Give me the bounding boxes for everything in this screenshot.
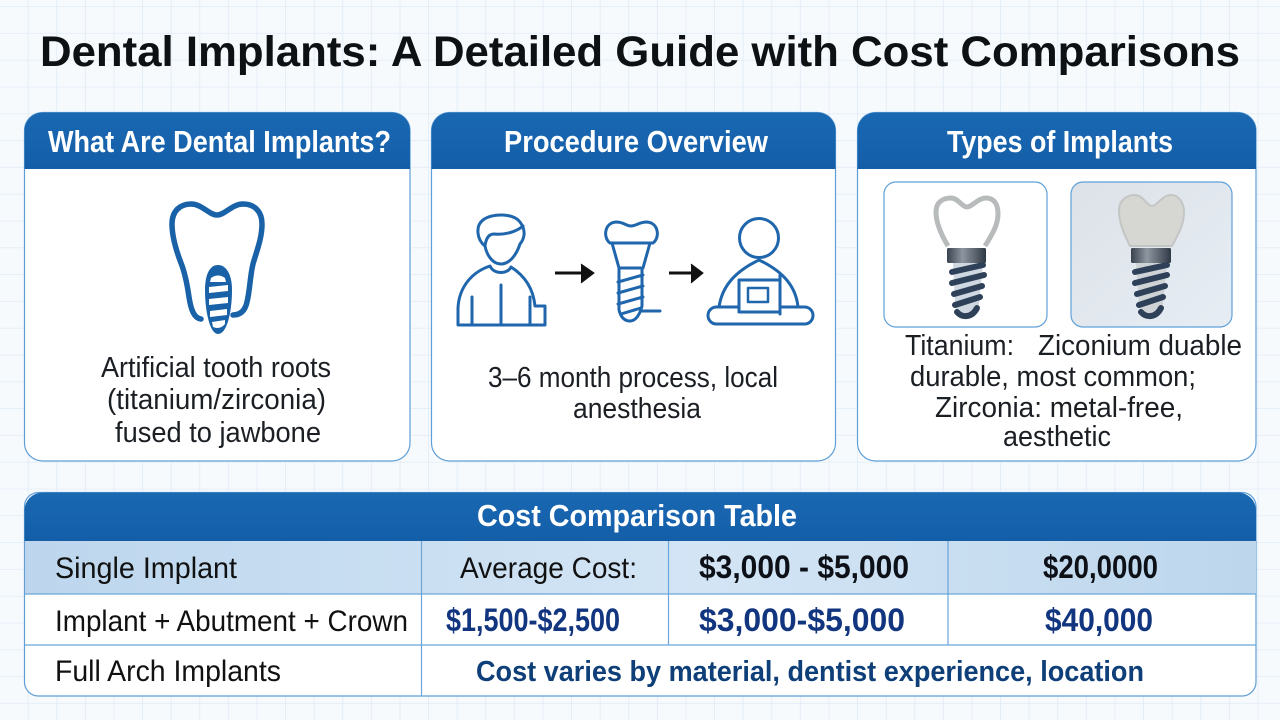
image card: titanium implant [884, 182, 1047, 327]
panel header: procedure overview [432, 112, 836, 169]
arrow: patient to implant [555, 264, 594, 283]
table heading: Cost Comparison Table [477, 498, 797, 533]
heading: procedure overview: Procedure Overview [504, 124, 769, 159]
table row: single implant [25, 541, 1256, 594]
text: what are dental implants description: Artificial tooth roots [101, 352, 331, 384]
panel: types of implants [858, 112, 1256, 461]
table row: implant + abutment + crown: $40,000 [1045, 602, 1153, 638]
arrow: implant to recovery [669, 264, 703, 283]
icon: dentist with monitor [708, 218, 813, 324]
text: procedure description: 3–6 month process, local [488, 362, 778, 394]
text: implant types description: Zirconia: metal-free, [935, 392, 1183, 424]
text: what are dental implants description: fused to jawbone [115, 417, 321, 449]
text: procedure description: anesthesia [573, 393, 702, 425]
heading: what are dental implants: What Are Dental Implants? [48, 124, 391, 159]
table header bar [24, 492, 1256, 541]
icon: implant [606, 222, 660, 321]
panel header: types of implants [858, 112, 1256, 169]
title: Dental Implants: A Detailed Guide with Cost Comparisons [40, 28, 1240, 76]
icon: tooth with implant [172, 204, 262, 334]
text: implant types description: aesthetic [1003, 421, 1111, 453]
text: implant types description: durable, most common; [910, 361, 1196, 393]
icon: implant screw in tooth [205, 265, 232, 334]
icon: patient [458, 215, 545, 325]
panel header: what are dental implants [24, 112, 410, 169]
table row: single implant: $20,0000 [1043, 549, 1158, 585]
text: implant types description: Ziconium duable [1038, 330, 1242, 362]
table row: full arch implants [55, 655, 1144, 688]
table row: implant + abutment + crown: $1,500-$2,500 [446, 602, 620, 638]
heading: types of implants: Types of Implants [947, 124, 1173, 159]
image card: zirconia implant [1071, 182, 1232, 327]
table row: full arch implants: Full Arch Implants [55, 655, 281, 688]
cost comparison table [24, 492, 1256, 696]
table row: single implant: Single Implant [55, 552, 238, 585]
panel: procedure overview [432, 112, 836, 461]
text: what are dental implants description: (titanium/zirconia) [107, 384, 326, 416]
text: what are dental implants description [101, 352, 331, 449]
table row: implant + abutment + crown [55, 602, 1153, 638]
table row: single implant: $3,000 - $5,000 [699, 549, 909, 585]
table row: implant + abutment + crown: Implant + Abutment + Crown [55, 605, 408, 638]
text: implant types description: Titanium: [905, 330, 1014, 362]
text: implant types description [905, 330, 1242, 453]
text: procedure description [488, 362, 778, 425]
table row: implant + abutment + crown: $3,000-$5,000 [699, 602, 905, 638]
table row: single implant: Average Cost: [460, 552, 637, 585]
table row: full arch implants: Cost varies by material, dentist experience, location [476, 656, 1144, 688]
panel: what are dental implants [24, 112, 410, 461]
